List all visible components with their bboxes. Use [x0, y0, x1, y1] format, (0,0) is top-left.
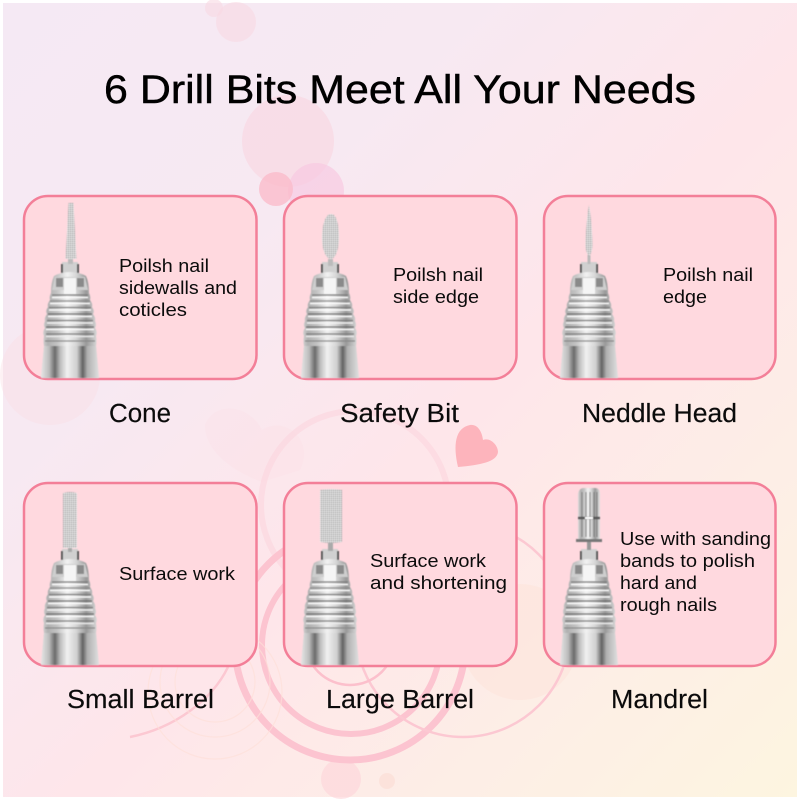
label: Small Barrel: Small Barrel — [67, 686, 214, 714]
icon: cone bit on handpiece — [41, 203, 99, 378]
icon: large barrel bit on handpiece — [301, 489, 359, 665]
description: Cone: coticles — [119, 299, 187, 320]
description: Large Barrel — [370, 550, 507, 593]
description: Mandrel: bands to polish — [620, 550, 755, 571]
description: Cone — [119, 255, 237, 320]
description: Safety Bit: side edge — [393, 286, 479, 307]
description: Mandrel — [620, 528, 771, 615]
description: Large Barrel: and shortening — [370, 572, 507, 593]
icon: mandrel on handpiece — [560, 488, 618, 665]
description: Mandrel: hard and — [620, 572, 697, 593]
title: 6 Drill Bits Meet All Your Needs — [104, 68, 696, 112]
description: Neddle Head: edge — [663, 286, 707, 307]
icon: safety bit on handpiece — [301, 214, 359, 378]
description: Neddle Head — [663, 264, 753, 307]
label: Large Barrel: Large Barrel — [326, 686, 474, 714]
panel: Neddle Head — [544, 196, 776, 379]
description: Cone: Poilsh nail — [119, 255, 209, 276]
icon: heart — [456, 425, 498, 467]
description: Neddle Head: Poilsh nail — [663, 264, 753, 285]
label: Safety Bit: Safety Bit — [340, 400, 459, 428]
description: Safety Bit: Poilsh nail — [393, 264, 483, 285]
description: Safety Bit — [393, 264, 483, 307]
label: Mandrel: Mandrel — [611, 686, 708, 714]
decorative bubbles and rings — [0, 0, 578, 799]
description: Mandrel: rough nails — [620, 594, 717, 615]
label: Neddle Head: Neddle Head — [582, 400, 737, 428]
description: Small Barrel: Surface work — [119, 563, 236, 584]
label: Cone: Cone — [109, 400, 171, 428]
panel: Large Barrel — [284, 483, 516, 666]
icon: needle bit on handpiece — [560, 205, 618, 378]
description: Mandrel: Use with sanding — [620, 528, 771, 549]
panel: Safety Bit — [284, 196, 516, 379]
panel: Mandrel — [544, 483, 776, 666]
description: Large Barrel: Surface work — [370, 550, 487, 571]
icon: small barrel bit on handpiece — [41, 492, 99, 665]
panel: Small Barrel — [24, 483, 256, 666]
description: Cone: sidewalls and — [119, 277, 237, 298]
panel: Cone — [24, 196, 256, 379]
